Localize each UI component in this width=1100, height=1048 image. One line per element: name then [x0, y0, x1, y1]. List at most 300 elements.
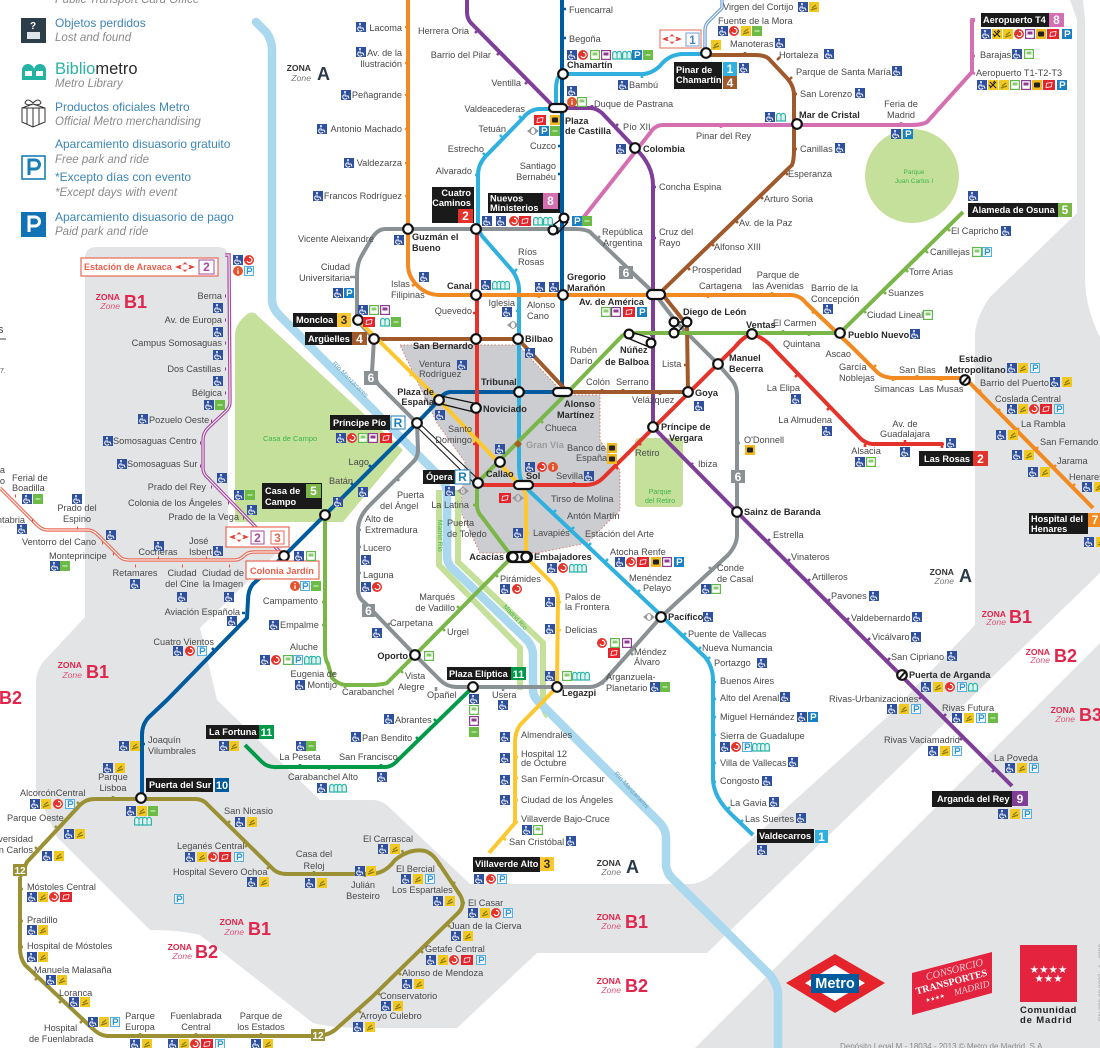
line 8: [583, 20, 975, 218]
light rail box: Estación de Aravaca: [81, 258, 218, 276]
station labels: north and centre: Rodríguez: [419, 369, 462, 379]
logo: Comunidad de Madrid: ★★★: [1034, 973, 1063, 985]
logo: Comunidad de Madrid: ★★★★: [1030, 964, 1067, 976]
station labels: south: Conservatorio: [380, 991, 437, 1001]
station labels: north and centre: Menéndez: [629, 573, 672, 583]
badge: Nuevos Ministerios 8: 8: [547, 194, 554, 208]
zone A north: A: [317, 64, 330, 84]
station labels: north and centre: Puerta: [397, 490, 425, 500]
station labels: north and centre: Lago: [349, 457, 369, 467]
park: Juan Carlos I: Juan Carlos I: [895, 178, 933, 185]
badge: Argüelles 4: 4: [356, 332, 363, 346]
river Manzanares: Madrid Río: [436, 520, 443, 552]
station labels: north and centre: Canillas: [800, 144, 833, 154]
badge: line 12: [13, 864, 325, 1042]
station labels: south: Besteiro: [346, 891, 380, 901]
badge: Villaverde Alto 3: Villaverde Alto: [475, 859, 539, 869]
station labels: north and centre: Pueblo Nuevo: [848, 330, 910, 340]
station labels: east: Noblejas: [839, 373, 875, 383]
station labels: west light rail: Cocheras: [138, 547, 178, 557]
line 6: [350, 229, 740, 691]
zone A north: Zone: [290, 73, 311, 83]
logo: Consorcio Transportes Madrid: MADRID: [952, 979, 991, 999]
legend: official merchandising: Productos oficiales Metro: [55, 100, 190, 114]
zone B2 south: B2: [195, 942, 218, 962]
station labels: south: Parque de: [240, 1011, 282, 1021]
badge: Cuatro Caminos 2: 2: [462, 209, 469, 223]
station labels: north and centre: Esperanza: [788, 169, 833, 179]
station labels: south: Parque: [98, 772, 128, 782]
central fare zone: [400, 345, 620, 553]
station labels: west light rail: Campus Somosaguas: [132, 338, 222, 348]
zone B1 centre south: [597, 912, 648, 932]
badge: Pinar de Chamartín 1 4: [674, 62, 737, 90]
line 12: [20, 796, 465, 1036]
station labels: south: Aviación Española: [165, 607, 241, 617]
station labels: south: AlcorcónCentral: [20, 788, 85, 798]
station labels: north and centre: Conde: [717, 563, 744, 573]
legend: lost and found: Lost and found: [55, 32, 132, 44]
station labels: south: Lisboa: [99, 783, 127, 793]
station labels: north and centre: Torre Arias: [909, 267, 953, 277]
station labels: north and centre: Colombia: [643, 144, 686, 154]
legend: lost and found: [21, 16, 146, 44]
station labels: north and centre: Delicias: [565, 625, 598, 635]
station labels: north and centre: Vista: [405, 671, 426, 681]
badge: Casa de Campo 5: Casa de: [265, 486, 300, 496]
park: Casa de Campo: [235, 312, 403, 522]
zone B1 west: ZONA: [96, 292, 120, 302]
station labels: south: La Peseta: [279, 752, 322, 762]
station labels: north and centre: San Lorenzo: [800, 89, 852, 99]
station labels: north and centre: España: [401, 397, 435, 407]
station labels: south: Reloj: [304, 861, 324, 871]
line 1: [475, 54, 753, 835]
station labels: north and centre: Marañón: [567, 283, 606, 293]
station labels: north and centre: Retiro: [635, 448, 660, 458]
badge: Arganda del Rey 9: 9: [1017, 792, 1024, 806]
zone B2 east: B2: [1054, 646, 1077, 666]
station labels: north and centre: Rosas: [518, 257, 544, 267]
legend: paid park and ride: [21, 210, 234, 238]
badge: Cuatro Caminos 2: Cuatro: [441, 188, 471, 198]
station labels: west light rail: Pozuelo Oeste: [149, 415, 209, 425]
light rail box: Estación de Aravaca: 2: [203, 260, 210, 274]
station labels: south: El Bercial: [396, 864, 435, 874]
station labels: west light rail: Somosaguas Centro: [113, 436, 197, 446]
legend: paid park and ride: Aparcamiento disuasorio de pago: [55, 210, 234, 224]
zone B2 south: ZONA: [168, 942, 192, 952]
badge: line 6: 6: [735, 470, 742, 484]
station labels: south: Central: [181, 1022, 211, 1032]
logo: Consorcio Transportes Madrid: ★★★★: [925, 993, 946, 1004]
zone B2 centre south: [597, 976, 648, 996]
zone B2 east: ZONA: [1026, 647, 1050, 657]
light rail lines: [0, 0, 722, 566]
station labels: north and centre: Chueca: [545, 423, 578, 433]
station labels: east: Estadio: [959, 354, 993, 364]
zone B1 southwest: Zone: [61, 670, 82, 680]
station labels: north and centre: Vergara: [669, 433, 704, 443]
station labels: north and centre: Manoteras: [730, 39, 774, 49]
interchange stations: [136, 48, 970, 803]
legend: Bibliometro: Metro Library: [55, 78, 124, 90]
light rail box: ML2 ML3: 3: [274, 531, 281, 545]
station labels: north and centre: Canillejas: [930, 247, 970, 257]
station labels: north and centre: El Capricho: [951, 226, 998, 236]
station labels: west light rail: Dos Castillas: [167, 364, 221, 374]
badge: Casa de Campo 5: 5: [310, 484, 317, 498]
station labels: north and centre: Embajadores: [534, 552, 592, 562]
light rail box: Estación de Aravaca: Estación de Aravaca: [84, 262, 173, 272]
station labels: north and centre: Barajas: [980, 50, 1012, 60]
station labels: north and centre: Gran Vía: [526, 440, 565, 450]
zone B1 east: ZONA: [982, 609, 1006, 619]
legend: Bibliometro: [22, 60, 138, 90]
badge: line 6: [362, 266, 745, 618]
station labels: east: Sierra de Guadalupe: [720, 731, 805, 741]
zone B2 east: Zone: [1029, 655, 1050, 665]
line 4: [374, 52, 797, 395]
station labels: north and centre: Goya: [695, 388, 719, 398]
station labels: south: Abrantes: [395, 715, 432, 725]
station labels: east: La Gavia: [730, 798, 768, 808]
station labels: north and centre: Universitaria: [299, 273, 351, 283]
badge: Alameda de Osuna 5: Alameda de Osuna: [972, 205, 1056, 215]
badge: Aeropuerto T4 8: Aeropuerto T4: [983, 15, 1047, 25]
station labels: south: Eugenia de: [290, 669, 337, 679]
station labels: south: Villaverde Bajo-Cruce: [521, 814, 610, 824]
station labels: north and centre: Batán: [329, 476, 353, 486]
badge: Las Rosas 2: Las Rosas: [924, 454, 970, 464]
station labels: north and centre: Cartagena: [699, 281, 743, 291]
line 10: [142, 0, 566, 798]
badge: Moncloa 3: [293, 313, 351, 327]
station labels: west light rail: José: [189, 536, 208, 546]
station labels: south: Loranca: [59, 988, 93, 998]
station labels: north and centre: Príncipe de: [661, 422, 711, 432]
station labels: north and centre: Lavapiés: [533, 528, 570, 538]
station labels: west light rail: Colonia de los Ángeles: [128, 498, 222, 508]
station labels: south: Campamento: [263, 596, 318, 606]
line 5: [322, 212, 963, 688]
zone B1 centre south: Zone: [600, 921, 621, 931]
station labels: east: Guadalajara: [880, 429, 931, 439]
park: Retiro: [635, 438, 683, 507]
station labels: north and centre: Av. de América: [579, 297, 645, 307]
station labels: north and centre: Marqués: [419, 592, 455, 602]
zone A east: A: [959, 566, 972, 586]
station labels: east: O'Donnell: [744, 435, 784, 445]
station labels: north and centre: Valdezarza: [357, 158, 403, 168]
station labels: north and centre: Opañel: [427, 690, 457, 700]
station labels: north and centre: Fuencarral: [569, 5, 613, 15]
station labels: west light rail: Ciudad: [167, 568, 197, 578]
station labels: east: Puerta de Arganda: [909, 670, 991, 680]
station labels: north and centre: Canal: [447, 281, 472, 291]
station labels: north and centre: Atocha Renfe: [610, 547, 666, 557]
station labels: east: Ascao: [825, 349, 851, 359]
station labels: west light rail: Bélgica: [192, 388, 223, 398]
badge: Alameda de Osuna 5: 5: [1062, 203, 1069, 217]
badge: Príncipe Pío R: R: [394, 416, 403, 430]
park: Juan Carlos I: Parque: [904, 169, 925, 176]
station labels: north and centre: Darío: [570, 356, 592, 366]
station labels: east: Puente de Vallecas: [688, 629, 767, 639]
station labels: west light rail: Ventorro del Cano: [22, 537, 96, 547]
station labels: north and centre: Gregorio: [567, 272, 606, 282]
station labels: north and centre: Mar de Cristal: [799, 110, 860, 120]
station labels: east: Rivas Futura: [942, 703, 995, 713]
zone B2 centre south: B2: [625, 976, 648, 996]
zone B2 centre south: Zone: [600, 985, 621, 995]
station labels: north and centre: Plaza de: [397, 387, 434, 397]
station labels: north and centre: Alfonso XIII: [714, 242, 761, 252]
station labels: north and centre: Santo: [448, 424, 472, 434]
logo: Consorcio Transportes Madrid: CONSORCIO: [925, 957, 985, 983]
badge: Ópera R: R: [458, 470, 467, 484]
station labels: north and centre: Puerta: [447, 518, 475, 528]
zone B1 southwest: B1: [86, 662, 109, 682]
station labels: east: La Elipa: [767, 383, 801, 393]
line 2: [473, 229, 942, 485]
station labels: north and centre: Velázquez: [632, 395, 675, 405]
badge: Aeropuerto T4 8: [981, 13, 1064, 27]
station labels: south: Parque Oeste: [7, 813, 64, 823]
station labels: north and centre: Parque de: [757, 270, 799, 280]
station labels: west light rail: Prado del: [57, 503, 97, 513]
station labels: south: Joaquín: [148, 735, 181, 745]
station labels: north and centre: Rayo: [659, 238, 680, 248]
station labels: north and centre: Ventura: [419, 359, 452, 369]
station labels: south: Juan de la Cierva: [450, 921, 522, 931]
zone A north: ZONA: [287, 63, 311, 73]
logo: Comunidad de Madrid: de Madrid: [1020, 1015, 1073, 1026]
station labels: north and centre: Álvaro: [634, 657, 660, 667]
station labels: north and centre: Plaza: [565, 116, 589, 126]
station labels: north and centre: Filipinas: [391, 290, 425, 300]
badge: line 12: 12: [14, 866, 26, 877]
station labels: east: Jarama: [1057, 456, 1089, 466]
station labels: north and centre: Alonso: [564, 399, 596, 409]
badge: Arganda del Rey 9: [932, 791, 1028, 807]
badge: Hospital del Henares 7: 7: [1092, 513, 1099, 527]
badge: Hospital del Henares 7: Henares: [1031, 524, 1067, 534]
station labels: south: de Octubre: [521, 758, 566, 768]
station labels: north and centre: Feria de: [884, 99, 918, 109]
station labels: north and centre: Aeropuerto T1-T2-T3: [976, 68, 1062, 78]
station labels: north and centre: de Balboa: [605, 357, 650, 367]
station labels: north and centre: Becerra: [729, 364, 764, 374]
station labels: south: Vilumbrales: [148, 746, 196, 756]
zone B1 centre south: ZONA: [597, 912, 621, 922]
station box: Colonia Jardín: Colonia Jardín: [250, 566, 314, 576]
zone B3 east: ZONA: [1051, 705, 1075, 715]
park: Juan Carlos I: [865, 129, 959, 223]
legend: free park and ride: Aparcamiento disuasorio gratuito: [55, 137, 231, 151]
station labels: east: Barrio del Puerto: [980, 378, 1049, 388]
station labels: north and centre: Concha Espina: [659, 182, 722, 192]
station labels: north and centre: Serrano: [616, 377, 649, 387]
legend: free park and ride: *Excepto días con evento: [55, 170, 191, 184]
station labels: north and centre: Urgel: [447, 627, 469, 637]
badge: Valdecarros 1: [757, 829, 828, 844]
station labels: east: [688, 349, 1100, 855]
station labels: east: Portazgo: [714, 658, 751, 668]
station labels: north and centre: El Carmen: [773, 318, 816, 328]
station labels: east: Las Suertes: [745, 814, 794, 824]
station labels: north and centre: Casa de Campo: [263, 434, 317, 443]
station labels: north and centre: Valdeacederas: [464, 104, 525, 114]
station labels: west light rail: Monteprincipe: [49, 551, 107, 561]
badge: Moncloa 3: Moncloa: [296, 315, 334, 325]
river Manzanares: Río Manzanares: [613, 771, 651, 811]
station labels: west light rail: la Imagen: [203, 579, 243, 589]
station labels: north and centre: Antonio Machado: [330, 124, 402, 134]
station labels: north and centre: Antón Martín: [567, 511, 620, 521]
legend: lost and found: ?: [30, 21, 36, 32]
station labels: north and centre: de Vadillo: [415, 603, 455, 613]
park: Retiro: Parque: [649, 489, 671, 496]
zone B2 south: [168, 942, 218, 962]
station labels: east: Congosto: [720, 776, 759, 786]
light rail ML2: [200, 255, 284, 556]
station labels: east: Artilleros: [812, 572, 848, 582]
station labels: west light rail: Retamares: [113, 568, 158, 578]
badge: Moncloa 3: 3: [341, 313, 348, 327]
station labels: north and centre: Cano: [527, 311, 549, 321]
logo: Metro: [786, 954, 885, 1013]
station labels: south: San Fermín-Orcasur: [521, 774, 605, 784]
legend: Bibliometro: Bibliometro: [55, 60, 138, 78]
station labels: north and centre: Fuente de la Mora: [718, 16, 793, 26]
station labels: north and centre: Diego de León: [683, 307, 747, 317]
station labels: north and centre: Carpetana: [390, 618, 434, 628]
station labels: north and centre: Ciudad Lineal: [867, 310, 923, 320]
park: Retiro: del Retiro: [645, 498, 675, 505]
station labels: east: Metropolitano: [945, 365, 1006, 375]
station labels: north and centre: Alegre: [398, 682, 425, 692]
badge: La Fortuna 11: La Fortuna: [209, 727, 257, 737]
legend: lost and found: Objetos perdidos: [55, 16, 146, 30]
station labels: north and centre: Pío XII: [623, 122, 651, 132]
station labels: north and centre: España: [576, 453, 608, 463]
station labels: west light rail: Av. de Europa: [165, 315, 223, 325]
station labels: south: Arroyo Culebro: [360, 1011, 422, 1021]
station labels: east: San Cipriano: [891, 652, 944, 662]
station labels: north and centre: Alto de: [365, 514, 394, 524]
station labels: west light rail: Somosaguas Sur: [127, 459, 197, 469]
station labels: north and centre: de Casal: [717, 574, 753, 584]
station labels: north and centre: San Bernardo: [413, 341, 474, 351]
station labels: north and centre: Ventilla: [491, 78, 522, 88]
badge: La Fortuna 11: 11: [261, 727, 272, 739]
zone B1 east: B1: [1009, 607, 1032, 627]
station labels: north and centre: La Latina: [431, 500, 470, 510]
transfer connectors: [415, 220, 687, 485]
station labels: south: los Estados: [237, 1022, 285, 1032]
station labels: north and centre: Arturo Soria: [764, 194, 814, 204]
station labels: west light rail: Ciudad de: [202, 568, 244, 578]
river Manzanares: [256, 22, 778, 1048]
Madrid Rio green banks: [439, 490, 548, 716]
badge: Pinar de Chamartín 1 4: 4: [727, 76, 734, 90]
station labels: north and centre: Guzmán el: [412, 232, 458, 242]
station labels: south: Casa del: [296, 849, 332, 859]
station labels: south: Manuela Malasaña: [34, 965, 113, 975]
station labels: north and centre: Pelayo: [643, 583, 671, 593]
badge: Nuevos Ministerios 8: Ministerios: [490, 203, 538, 213]
station labels: west light rail: Boadilla: [12, 483, 46, 493]
station labels: north and centre: Manuel: [729, 353, 761, 363]
badge: Valdecarros 1: Valdecarros: [759, 831, 811, 841]
zone B1 southwest: ZONA: [58, 660, 82, 670]
badge: Casa de Campo 5: Campo: [265, 497, 297, 507]
station labels: north and centre: Usera: [492, 690, 517, 700]
legend: free park and ride: [22, 137, 231, 199]
legend: paid park and ride: Paid park and ride: [55, 226, 148, 238]
station labels: south: Pan Bendito: [362, 733, 412, 743]
station labels: north and centre: Parque de Santa María: [796, 67, 892, 77]
station labels: north and centre: Laguna: [363, 570, 395, 580]
station labels: south: El Carrascal: [363, 834, 413, 844]
station labels: south: Los Espartales: [392, 885, 453, 895]
station labels: west light rail: Prado del Rey: [148, 482, 206, 492]
station labels: north and centre: Lucero: [363, 543, 391, 553]
station labels: south: Alonso de Mendoza: [402, 968, 484, 978]
station labels: south: Julián: [351, 880, 375, 890]
badge: Las Rosas 2: [919, 451, 988, 466]
station labels: east: Coslada Central: [995, 394, 1061, 404]
station labels: south: Fuenlabrada: [170, 1011, 223, 1021]
station labels: north and centre: Banco de: [567, 443, 606, 453]
station labels: north and centre: Cuzco: [530, 141, 556, 151]
station labels: north and centre: Estación del Arte: [585, 529, 654, 539]
badge: line 12: 12: [312, 1031, 324, 1042]
badge: line 6: 6: [365, 604, 372, 618]
station labels: north and centre: Suanzes: [888, 288, 924, 298]
zone A east: [930, 566, 972, 586]
station labels: west light rail: Espino: [63, 514, 91, 524]
station labels: east: Rivas-Urbanizaciones: [829, 694, 919, 704]
station labels: north and centre: Madrid: [887, 110, 915, 120]
light rail ML3: [0, 488, 284, 566]
logo: Consorcio Transportes Madrid: TRANSPORTES: [915, 968, 989, 997]
station labels: north and centre: Bilbao: [525, 334, 553, 344]
station labels: east: Estrella: [773, 530, 805, 540]
zone A south: A: [626, 857, 639, 877]
station labels: north and centre: Alonso: [527, 300, 555, 310]
station labels: east: La Almudena: [778, 415, 833, 425]
badge: Valdecarros 1: 1: [818, 830, 825, 844]
station labels: east: La Poveda: [994, 753, 1039, 763]
station labels: north and centre: Francos Rodríguez: [324, 191, 402, 201]
station labels: north and centre: de Toledo: [447, 529, 487, 539]
zone B2 centre south: ZONA: [597, 976, 621, 986]
station labels: north and centre: Vicente Aleixandre: [298, 234, 374, 244]
station labels: north and centre: del Ángel: [380, 501, 418, 511]
badge: Puerta del Sur 10: [146, 778, 229, 792]
badge: Plaza Elíptica 11: 11: [513, 669, 524, 681]
station labels: north and centre: Oporto: [377, 651, 408, 661]
station labels: south: San Francisco: [339, 752, 398, 762]
station labels: north and centre: Argentina: [603, 238, 643, 248]
station labels: east: Alsacia: [851, 446, 882, 456]
station labels: north and centre: Ventas: [746, 320, 776, 330]
station labels: east: García: [839, 362, 867, 372]
badge: Príncipe Pío R: Príncipe Pío: [333, 418, 386, 428]
badge: Aeropuerto T4 8: 8: [1053, 13, 1060, 27]
